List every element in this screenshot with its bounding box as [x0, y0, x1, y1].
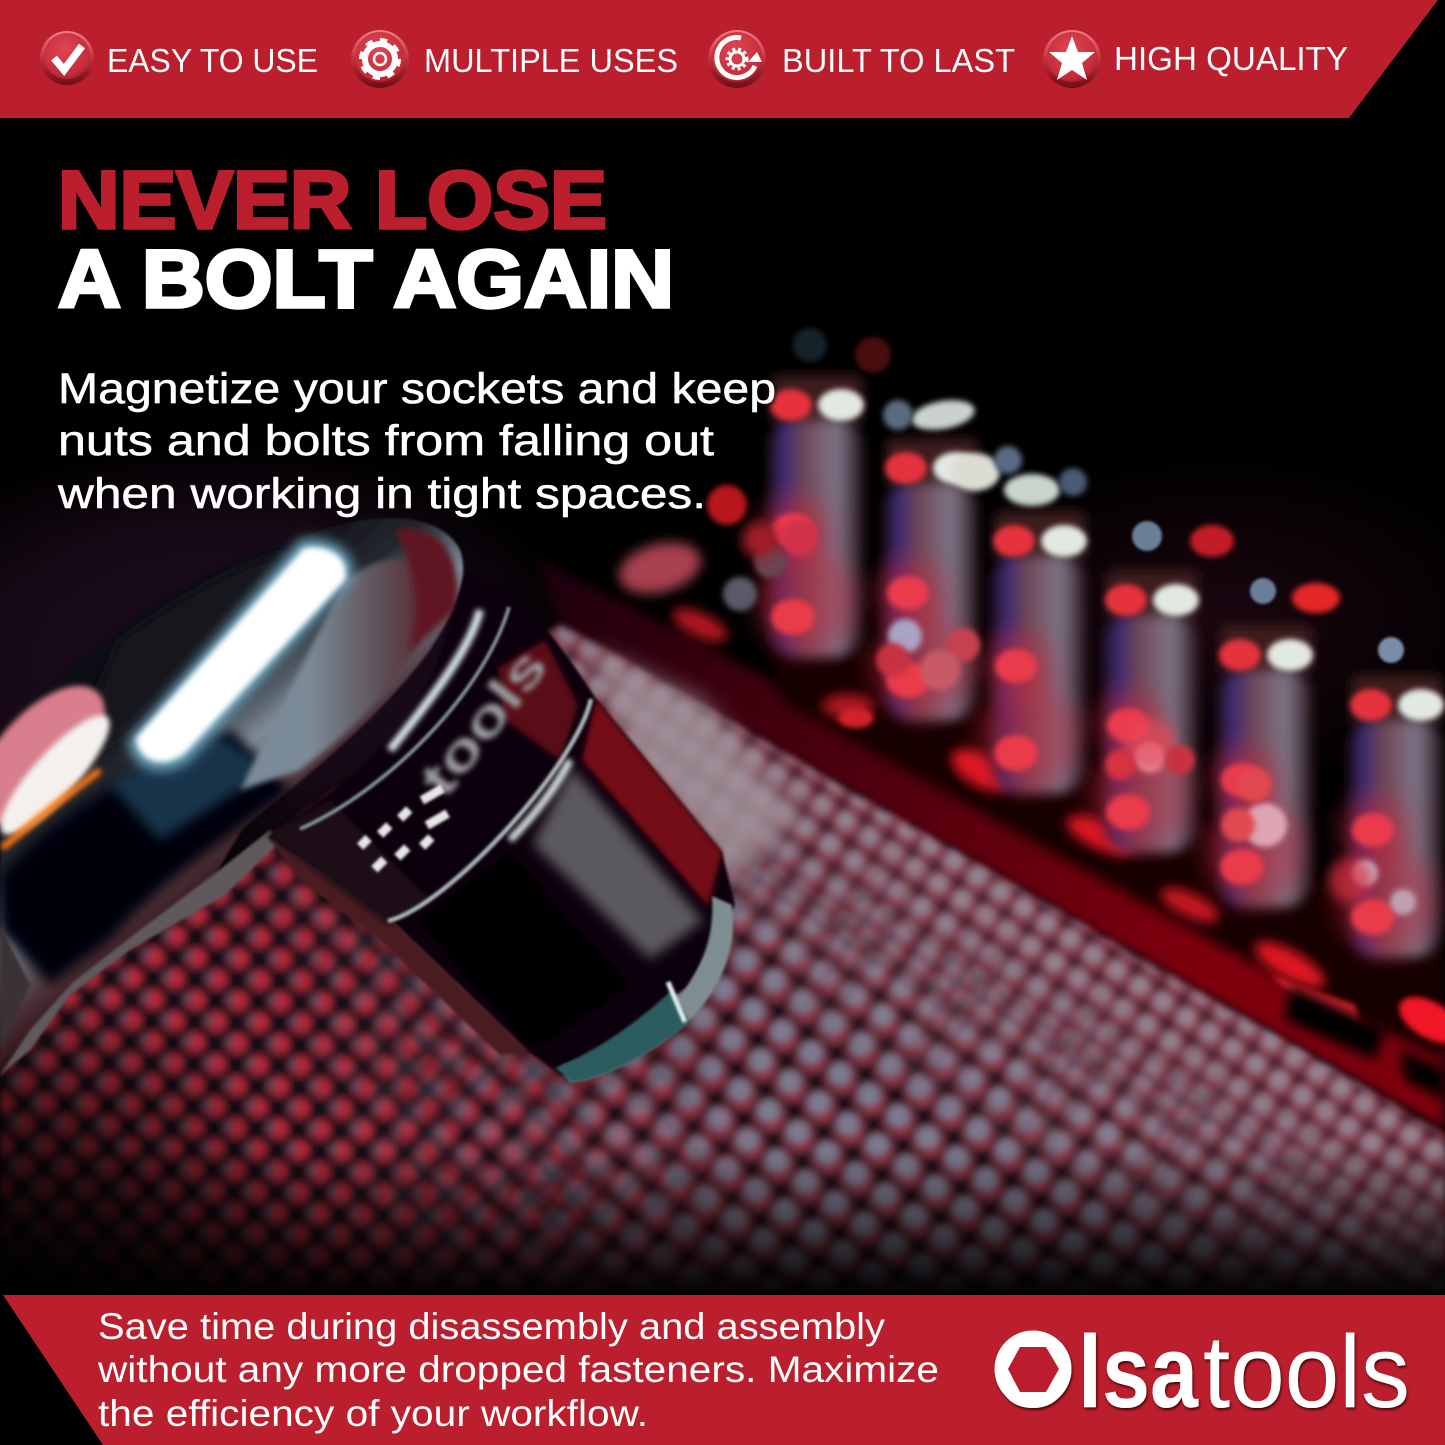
photo: socket set on magnetic rail [0, 326, 1445, 1290]
socket end face [562, 896, 733, 1082]
grey band [533, 768, 703, 959]
rings [300, 607, 509, 829]
intro paragraph [57, 365, 776, 518]
ratchet head [0, 518, 463, 1080]
feature label: easy to use: EASY TO USE [107, 42, 318, 79]
top banner [0, 0, 1438, 118]
logo: Olsatools: lsa [1078, 1314, 1199, 1429]
foreground ratchet and socket [0, 518, 735, 1082]
shadow panel [417, 852, 630, 1051]
logo: Olsatools: O [994, 1314, 1072, 1430]
footer text: the efficiency of your workflow. [98, 1393, 648, 1434]
headline: NEVER LOSE [58, 155, 607, 246]
icon: gear [351, 30, 409, 88]
knurled base [268, 837, 528, 1055]
feature label: built to last: BUILT TO LAST [782, 42, 1015, 79]
headline: A BOLT AGAIN [58, 234, 674, 325]
feature label: high quality: HIGH QUALITY [1114, 40, 1348, 77]
logo: Olsatools [994, 1314, 1410, 1430]
perforated mat [0, 625, 1445, 1320]
chrome reflection [240, 559, 432, 790]
icon: circular arrow with gear [708, 30, 766, 88]
intro paragraph: nuts and bolts from falling out [58, 417, 714, 465]
socket body [268, 575, 735, 1076]
icon: star [1043, 30, 1101, 88]
footer text: Save time during disassembly and assembly [98, 1306, 886, 1347]
intro paragraph: when working in tight spaces. [57, 470, 706, 518]
headline [58, 155, 674, 325]
highlight [128, 539, 353, 770]
feature label: multiple uses: MULTIPLE USES [424, 42, 678, 79]
intro paragraph: Magnetize your sockets and keep [58, 365, 776, 413]
icon: check mark [40, 31, 94, 85]
footer text [97, 1306, 939, 1434]
logo: Olsatools: tools [1203, 1314, 1410, 1429]
magnetic rail [540, 560, 1445, 1130]
red band [582, 700, 722, 906]
bottom banner [3, 1295, 1445, 1445]
footer text: without any more dropped fasteners. Maximize [97, 1349, 939, 1390]
background sockets [613, 328, 1444, 957]
engraved brand: tools [409, 638, 559, 807]
